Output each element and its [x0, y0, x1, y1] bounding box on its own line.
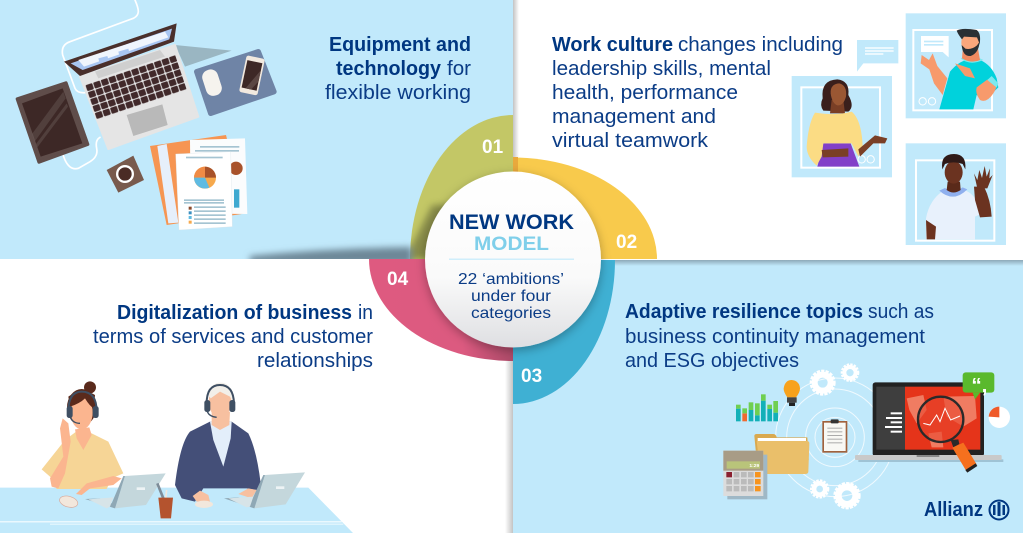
center text: 22 ‘ambitions’ [458, 271, 564, 288]
logo: Allianz: Allianz [924, 499, 983, 521]
illustration: data and analytics [723, 366, 1010, 506]
panel: adaptive resilience background [513, 260, 1023, 533]
segment 03 [513, 260, 615, 404]
segment 01 shadow [410, 201, 446, 259]
text: digitalization: Digitalization of business [117, 302, 352, 324]
text: adaptive resilience: such as [868, 301, 934, 323]
laptop shadow wedge [175, 45, 232, 67]
text: equipment: technology [336, 58, 442, 80]
laptop [64, 23, 198, 149]
pie chart [194, 167, 216, 189]
text: adaptive resilience: business continuity management [625, 326, 925, 348]
text: work culture: Work culture [552, 34, 673, 56]
coffee coaster [107, 156, 144, 193]
text: equipment: for [447, 58, 471, 80]
text: work culture: health, performance [552, 82, 738, 104]
window: woman in yellow [792, 76, 892, 177]
text: equipment: flexible working [325, 82, 471, 104]
gears [813, 366, 857, 506]
illustration: video call participants [792, 13, 1006, 245]
center text: MODEL [474, 234, 549, 255]
text: digitalization: in [358, 302, 373, 324]
woman's laptop [85, 473, 166, 508]
segment numbers: 03 [521, 366, 542, 387]
text: adaptive resilience: Adaptive resilience topics [625, 301, 863, 323]
illustration: call centre agents [0, 381, 353, 533]
window: man waving [906, 143, 1006, 245]
text: adaptive resilience: and ESG objectives [625, 350, 799, 372]
center text [449, 211, 574, 322]
panel edge shadows [250, 0, 1023, 533]
text: work culture: changes including [678, 34, 843, 56]
table [0, 488, 353, 533]
calculator: 1:29 [749, 463, 760, 469]
window: man in teal [906, 13, 1006, 118]
bar chart [736, 394, 778, 421]
text: equipment: Equipment and [329, 34, 471, 56]
text: work culture: virtual teamwork [552, 130, 709, 152]
laptop with world map and magnifier [855, 382, 1003, 473]
center text: NEW WORK [449, 211, 574, 234]
center text: categories [471, 305, 551, 322]
center text: under four [471, 288, 552, 305]
folder [754, 434, 809, 474]
calculator [723, 451, 767, 499]
mouse [200, 68, 224, 98]
segment 02 [513, 158, 657, 259]
cable [62, 0, 138, 169]
pie icon [989, 407, 1010, 428]
pen cup [157, 483, 173, 518]
light bulb [784, 380, 800, 406]
speech bubble [857, 40, 898, 72]
man's laptop [224, 472, 305, 508]
segment numbers: 01 [482, 137, 504, 158]
segment 04 [369, 259, 513, 361]
woman agent [42, 381, 123, 495]
text: work culture [552, 34, 843, 152]
text: digitalization: relationships [257, 350, 373, 372]
text: work culture: management and [552, 106, 716, 128]
green quote bubble: “, [971, 374, 987, 397]
phone [239, 55, 265, 96]
mouse pad [197, 52, 274, 113]
ring segments [369, 115, 657, 404]
green quote bubble [963, 372, 994, 399]
tablet [17, 83, 88, 162]
segment 01 [410, 115, 513, 259]
illustration: laptop desk [17, 0, 274, 230]
panel: equipment background [0, 0, 513, 259]
mouse [58, 494, 79, 509]
text: equipment [325, 34, 471, 104]
text: adaptive resilience [625, 301, 934, 372]
segment numbers: 02 [616, 232, 637, 253]
segment 02 start shading [513, 157, 518, 172]
segment numbers: 04 [387, 269, 409, 290]
man agent [175, 383, 261, 508]
concentric rings [776, 378, 894, 497]
center disc [425, 172, 601, 348]
text: digitalization: terms of services and customer [93, 326, 373, 348]
segment numbers [387, 137, 637, 387]
clipboard [822, 419, 847, 453]
text: work culture: leadership skills, mental [552, 58, 771, 80]
text: digitalization [93, 302, 373, 372]
folder with reports [150, 135, 247, 230]
